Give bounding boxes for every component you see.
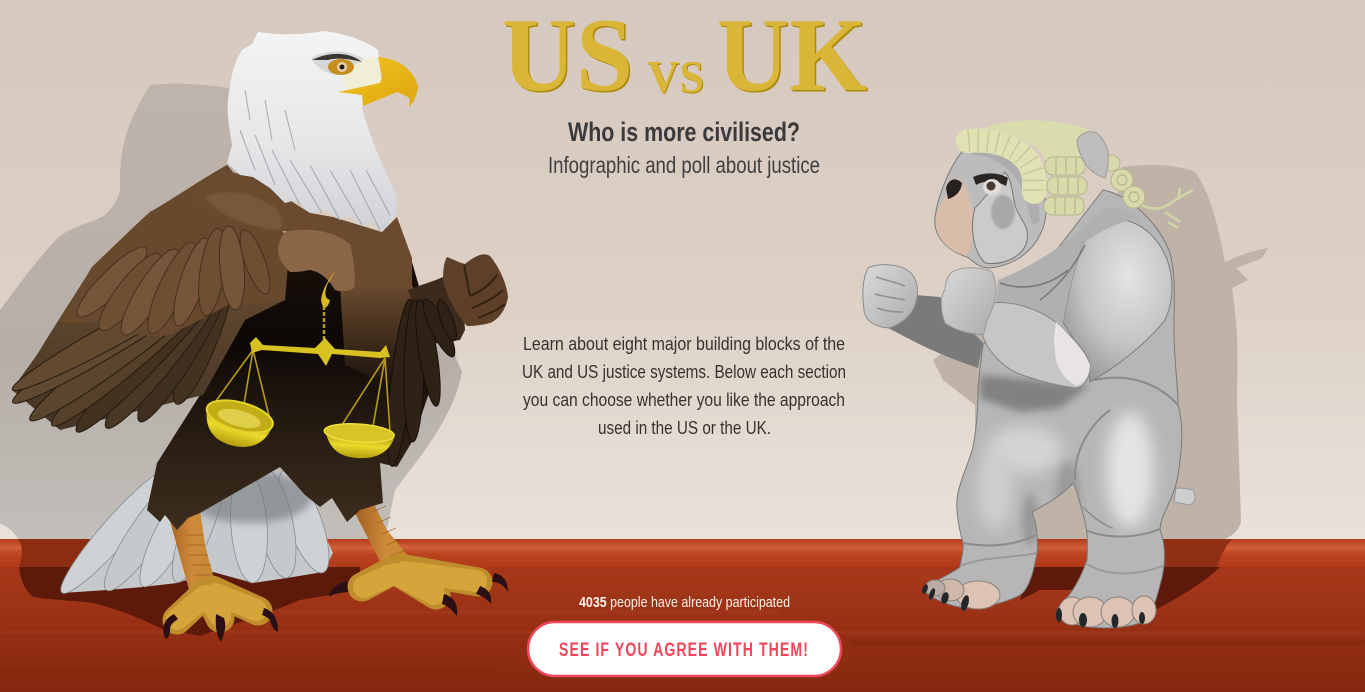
eagle feet with talons — [163, 568, 508, 642]
intro paragraph: you can choose whether you like the approach — [523, 389, 845, 410]
dog tail — [1174, 488, 1195, 505]
participation count: 4035 people have already participated — [579, 595, 790, 611]
dog floor shadow — [1020, 567, 1220, 620]
dog eye — [973, 173, 1008, 195]
call to action button: SEE IF YOU AGREE WITH THEM! — [559, 639, 809, 661]
scale chains — [213, 300, 390, 432]
title: US vs UK: VS — [648, 52, 705, 103]
bald eagle with scales — [6, 31, 508, 642]
title: US vs UK: VS — [647, 51, 704, 102]
intro paragraph — [522, 333, 846, 438]
eagle wall shadow — [0, 84, 462, 567]
intro paragraph: used in the US or the UK. — [598, 417, 771, 438]
background wall — [0, 0, 1365, 540]
wooden floor — [0, 567, 1365, 692]
eagle tail feathers — [51, 460, 339, 602]
wig tails — [1142, 188, 1193, 228]
eagle right arm — [382, 277, 465, 468]
dog chest folds — [996, 207, 1140, 323]
eagle white head — [227, 31, 397, 232]
eagle floor shadow — [19, 567, 360, 636]
scale hook — [321, 270, 336, 308]
left pan — [199, 394, 276, 454]
judge wig — [968, 120, 1193, 228]
call to action button — [528, 622, 841, 676]
dog paws — [921, 579, 1156, 628]
subtitle: Who is more civilised? — [568, 117, 800, 147]
eagle chest shading — [340, 285, 420, 395]
title: US vs UK — [502, 0, 868, 114]
title: US vs UK: UK — [718, 0, 868, 114]
dog upper arm — [1063, 220, 1172, 382]
dog extended fist — [863, 265, 918, 328]
dog wall shadow — [933, 165, 1268, 567]
dog near fist — [941, 268, 996, 335]
dog ear — [1077, 132, 1108, 178]
dog shading — [960, 375, 1178, 574]
eagle eye — [312, 54, 362, 75]
bulldog judge — [863, 120, 1195, 628]
title: US vs UK: US — [504, 0, 634, 114]
eagle wing — [6, 165, 290, 441]
skirting board — [0, 539, 1365, 568]
eagle shoulder and chest — [190, 170, 412, 291]
tagline: Infographic and poll about justice — [548, 152, 820, 178]
eagle yellow beak — [338, 57, 418, 107]
golden scales — [199, 270, 395, 460]
dog head — [935, 147, 1046, 268]
eagle body — [147, 240, 430, 530]
scale beam — [250, 337, 390, 366]
dog forearm — [983, 302, 1090, 388]
eagle legs — [167, 496, 417, 593]
eagle fist — [443, 254, 508, 326]
intro paragraph: Learn about eight major building blocks of the — [523, 333, 845, 354]
dog elbow highlight — [1054, 322, 1090, 386]
dog muzzle and nose — [946, 179, 962, 199]
intro paragraph: UK and US justice systems. Below each section — [522, 361, 846, 382]
right pan — [323, 422, 395, 460]
dog extended arm — [888, 295, 983, 368]
dog body — [923, 190, 1182, 628]
